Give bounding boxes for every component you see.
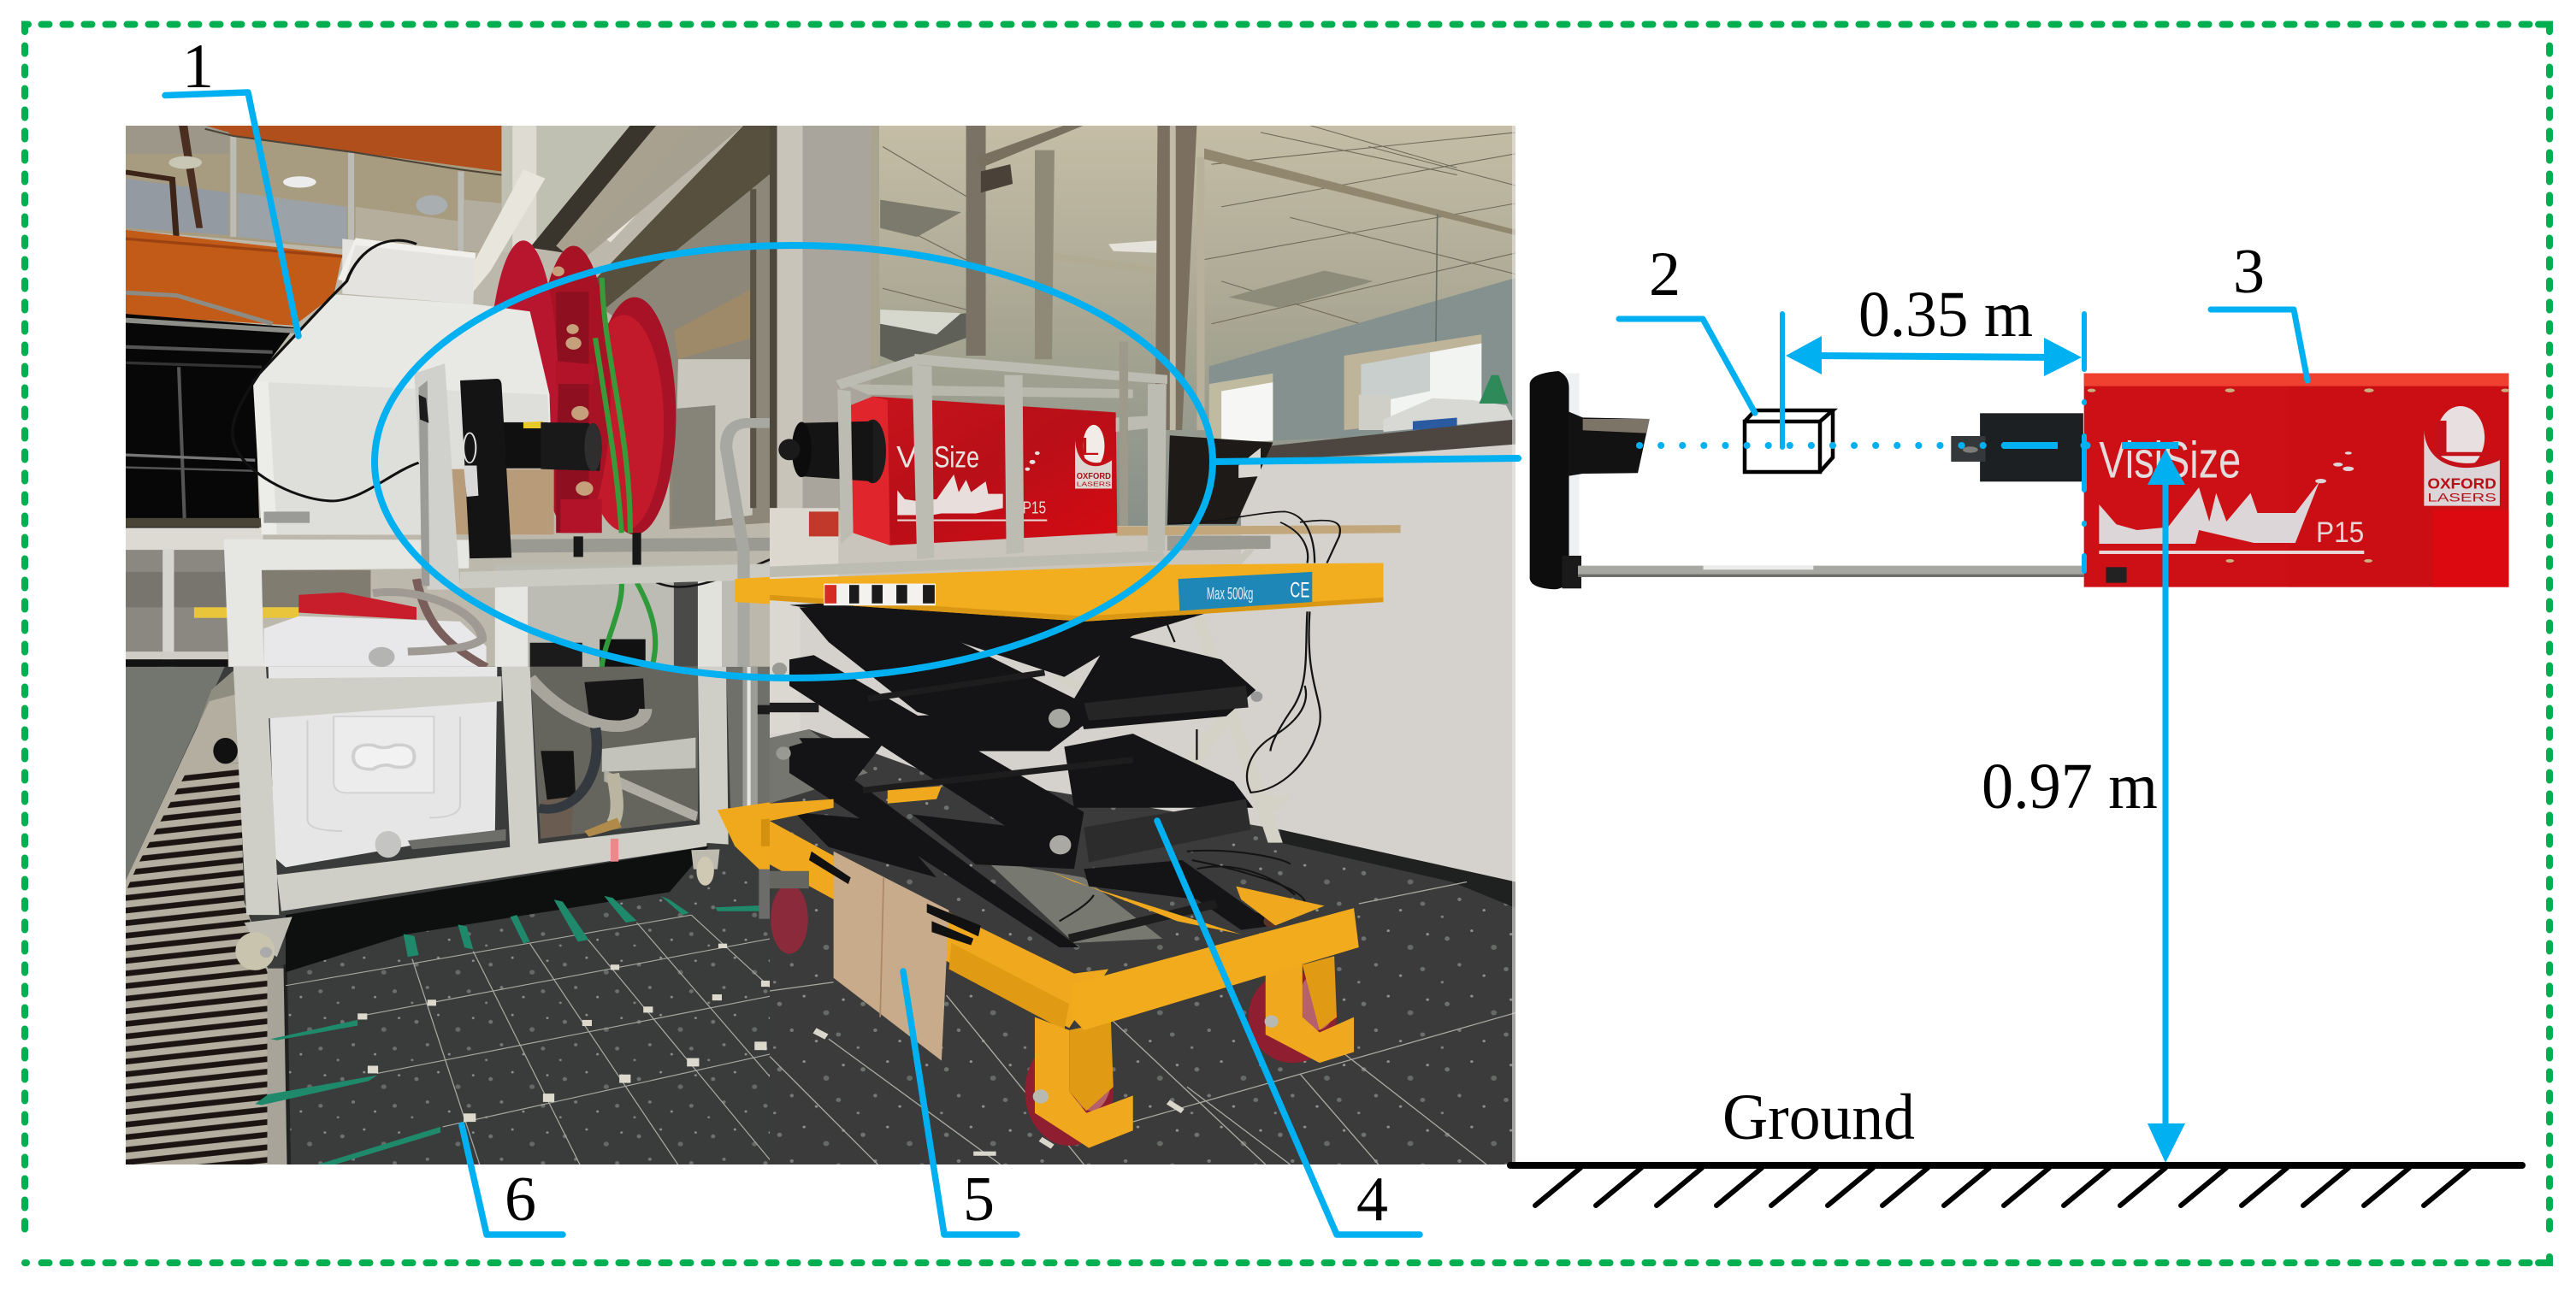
photo region: scissor lift [770,598,1515,1164]
label: 0.35 m: 0.35 m [1858,279,2033,351]
floor tiles [286,846,795,1165]
number 6: 6 [505,1164,536,1235]
right lens [1951,413,2083,481]
green cables [595,278,630,533]
red particle analyser box: LASERS [1077,481,1111,487]
red analyser body: P15 [2316,516,2364,549]
left transmitter plate and lens [1530,371,1650,589]
leader line: item 4 [1157,821,1420,1235]
lower interior and table frame [194,539,795,667]
number 1: 1 [182,32,214,102]
red particle analyser box: P15 [1023,498,1046,517]
photo region: upper right with Oxford Lasers unit [770,126,1518,622]
cart frame [233,667,729,915]
background windows and items [770,334,1518,598]
measurement cube [1745,410,1833,472]
connecting rod [1578,566,2084,577]
green tape strips [255,896,761,1165]
cardboard sheet [809,852,981,1061]
yellow lift table top [770,563,1384,622]
water tank [269,667,506,867]
drain grating [126,693,289,1165]
leader line: item 1 [165,92,298,336]
laptop and desk [1116,435,1401,565]
casters [213,738,719,970]
photo cut edge [1512,126,1515,1164]
red particle analyser box: V [896,440,918,475]
red particle analyser box: OXFORD [1077,471,1111,481]
ground label: Ground [1722,1082,1915,1153]
red analyser body: OXFORD [2427,475,2496,492]
scissor arms [770,598,1278,947]
aluminium post and rails [414,363,795,590]
background right of blower [501,126,777,529]
arrow: 0.35 m dimension [1786,336,2082,376]
number 3: 3 [2233,237,2265,307]
phase Doppler transmitter [460,379,602,558]
schematic of sensor head [1530,371,2509,589]
highlight ellipse and connector [375,245,1518,678]
floor [770,729,1515,1164]
arrow: 0.97 m dimension [2148,449,2185,1163]
chrome handle and table corner [720,418,770,667]
leader line: item 5 [903,971,1017,1235]
red particle analyser box: L [1080,433,1099,461]
red particle analyser box: Size [934,440,979,475]
yellow lift table top: Max 500kg [1207,584,1253,604]
black cable [233,240,419,501]
Oxford Lasers logo [2424,406,2500,506]
concrete column [777,126,871,510]
label: 0.97 m: 0.97 m [1982,751,2158,822]
Oxford Lasers logo: LASERS [2427,492,2496,504]
leader line: item 3 [2211,310,2307,380]
black wind tunnel area [126,314,294,667]
ground line with hatching [1510,1165,2522,1206]
pump and hoses [530,667,698,839]
leader line: item 6 [462,1125,563,1235]
yellow base frame [770,786,1325,1030]
number 2: 2 [1649,239,1681,310]
photo region: upper left with blower [126,126,795,667]
white blower body [253,169,554,534]
red analyser body: VisiSize [2099,432,2241,488]
number 4: 4 [1356,1164,1388,1235]
leader line: item 2 [1619,319,1755,413]
photo region: floor and water cart [126,667,801,1165]
Oxford Lasers logo: L [2425,410,2494,467]
lift pole and base corner [718,667,770,919]
loose cables [1060,611,1320,921]
wheels and forks [770,871,1359,1148]
red fan housing [488,240,676,534]
vertical reference ticks [1782,314,2084,571]
number 5: 5 [963,1164,995,1235]
upper left windows and orange wall [126,126,501,326]
table legs behind lift [1262,826,1283,843]
splash artwork [2099,481,2319,544]
photo of the test rig [126,126,1518,1165]
aluminium cage [770,341,1167,577]
red analyser body [2084,374,2509,587]
glass partition and ceiling [770,126,1518,526]
red particle analyser box [778,397,1117,545]
yellow lift table top: CE [1290,579,1309,602]
dotted laser axis [1640,442,2178,449]
